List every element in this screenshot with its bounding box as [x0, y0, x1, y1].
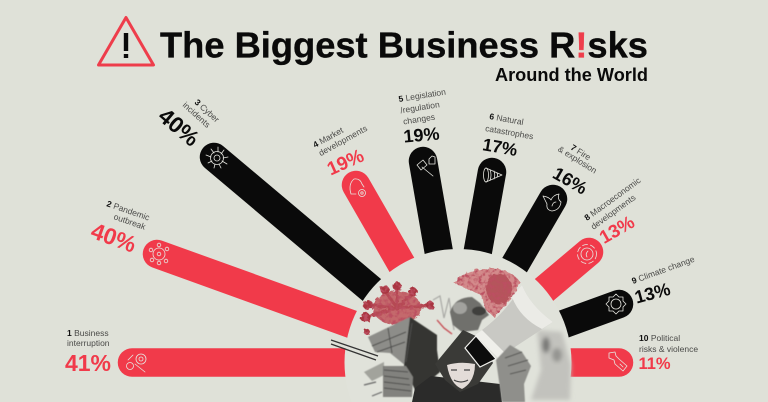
- megaphone ring: [465, 336, 496, 367]
- icon: virus: [149, 243, 169, 265]
- icon: gears and wrench: [126, 354, 146, 372]
- item 7: fire & explosion: [543, 137, 603, 211]
- bar 10: political risks and violence: [458, 348, 619, 377]
- icon: head and gear: [350, 179, 366, 196]
- bar 1: business interruption: [132, 348, 458, 377]
- figure hood: [435, 330, 493, 392]
- title: The Biggest Business R!sks: [160, 24, 648, 66]
- image: smoke cloud: [531, 330, 571, 400]
- label: [102, 198, 152, 232]
- figure mask: [447, 363, 475, 389]
- image: megaphone: [465, 285, 553, 367]
- value: 13%: [595, 211, 638, 248]
- item 10: political risks & violence: [609, 333, 698, 373]
- label: developments: [317, 123, 369, 158]
- label: [181, 92, 222, 132]
- building dark face: [404, 317, 440, 392]
- bar 6: natural catastrophes: [458, 172, 492, 362]
- label: outbreak: [112, 211, 148, 232]
- bar 8: macroeconomic developments: [458, 252, 589, 362]
- bar 3: cyber incidents: [214, 157, 458, 362]
- value: 16%: [549, 163, 591, 198]
- label: /regulation: [400, 99, 441, 115]
- value: 13%: [632, 279, 672, 308]
- label: 5 Legislation: [398, 87, 447, 104]
- image: crane arm: [331, 340, 378, 360]
- bar 5: legislation changes: [423, 161, 458, 362]
- item 8: macroeconomic developments: [578, 175, 650, 264]
- bar 7: fire and explosion: [458, 199, 553, 362]
- label: 3 Cyber: [193, 97, 222, 125]
- label: 4 Market: [311, 125, 345, 150]
- image: bear: [450, 297, 489, 332]
- collage backdrop: [344, 249, 572, 402]
- item 3: cyber incidents: [154, 92, 228, 168]
- icon: warning triangle: [98, 18, 154, 65]
- label: 10 Political: [639, 333, 680, 343]
- label: 6 Natural: [489, 111, 524, 127]
- image: office building: [364, 317, 440, 397]
- icon: globe with orbits: [578, 244, 596, 264]
- item 4: market developments: [311, 114, 369, 196]
- central collage: [331, 249, 572, 402]
- label: [398, 87, 450, 127]
- label: 8 Macroeconomic: [582, 175, 643, 223]
- item 6: natural catastrophes: [481, 111, 536, 182]
- icon: computer bug: [206, 147, 228, 168]
- icon: flame: [543, 194, 561, 211]
- label: incidents: [181, 100, 212, 130]
- image: hooded figure in mask: [412, 330, 502, 402]
- item 2: pandemic outbreak: [88, 198, 169, 265]
- value: 40%: [88, 217, 140, 258]
- item 10: political risks & violence: risks & violence: [639, 344, 698, 354]
- building lower block: [383, 366, 413, 397]
- building lit face: [368, 317, 410, 366]
- image: red mottled cloud: [454, 268, 520, 317]
- label: 2 Pandemic: [105, 198, 152, 223]
- subtitle: Around the World: [495, 65, 648, 85]
- figure body: [412, 376, 502, 402]
- bar 4: market developments: [356, 185, 458, 362]
- item 9: climate change: [606, 254, 696, 314]
- item 1: business interruption: interruption: [67, 338, 110, 348]
- image: fist holding megaphone: [496, 345, 531, 402]
- value: 11%: [638, 355, 671, 373]
- item 5: legislation / regulation changes: [398, 87, 450, 176]
- label: developments: [589, 192, 637, 232]
- bar 9: climate change: [458, 304, 619, 362]
- icon: molotov bottle: [609, 352, 627, 371]
- label: 9 Climate change: [630, 254, 696, 286]
- icon: tornado: [484, 168, 502, 182]
- value: 40%: [154, 103, 204, 151]
- value: 19%: [403, 123, 440, 147]
- icon: gavel: [417, 156, 435, 176]
- value: 17%: [481, 134, 519, 160]
- item 1: business interruption: [65, 328, 146, 376]
- megaphone cone: [475, 285, 553, 358]
- label: changes: [402, 112, 436, 127]
- label: 1 Business: [67, 328, 109, 338]
- label: catastrophes: [485, 123, 534, 141]
- fan of risk bars: [132, 157, 619, 362]
- label: 7 Fire: [569, 142, 593, 162]
- label: & explosion: [556, 144, 599, 176]
- value: 41%: [65, 350, 111, 376]
- image: stock chart line: [433, 296, 454, 334]
- image: red virus: [360, 282, 434, 335]
- value: 19%: [324, 146, 367, 180]
- icon: sun: [606, 294, 626, 314]
- bar 2: pandemic outbreak: [157, 254, 458, 362]
- label: [485, 111, 536, 141]
